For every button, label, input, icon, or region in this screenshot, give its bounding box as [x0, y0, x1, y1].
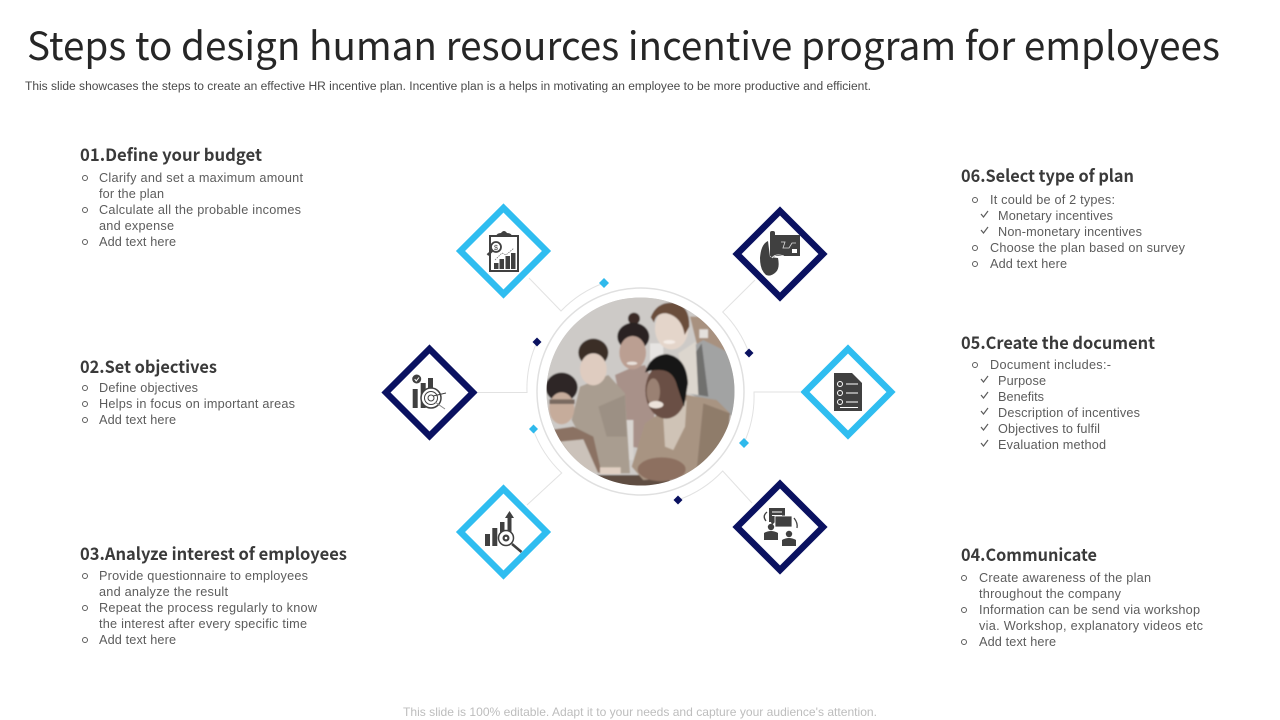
- bullet list: Purpose: [998, 374, 1046, 388]
- title: Steps to design human resources incentive program for employees: [27, 16, 1220, 72]
- connector and arc: step 06: [723, 280, 755, 353]
- heading: 02.Set objectives: [80, 353, 217, 378]
- heading: 06.Select type of plan: [961, 162, 1134, 187]
- footer note: This slide is 100% editable. Adapt it to your needs and capture your audience's attention.: [403, 705, 877, 719]
- icon: budget clipboard in blue diamond: $: [494, 245, 498, 252]
- bullet list: [972, 193, 1186, 271]
- subtitle: This slide showcases the steps to create an effective HR incentive plan. Incentive plan is a helps in motivating an employee to be more productive and efficient.: [25, 81, 871, 93]
- bullet list: [82, 381, 295, 427]
- icon: plan map with hand in navy diamond: [737, 211, 823, 297]
- bullet list: and analyze the result: [99, 585, 228, 599]
- icon: objectives target in navy diamond: [386, 349, 473, 436]
- panel: step 02 set objectives: [80, 353, 295, 427]
- bullet list: for the plan: [99, 187, 164, 201]
- bullet list: Add text here: [99, 413, 176, 427]
- bullet list: Add text here: [99, 235, 176, 249]
- bullet list: Define objectives: [99, 381, 198, 395]
- heading: 04.Communicate: [961, 541, 1097, 566]
- bullet list: Add text here: [979, 635, 1056, 649]
- bullet list: and expense: [99, 219, 174, 233]
- photo: team around a laptop: [546, 298, 734, 486]
- bullet list: Non-monetary incentives: [998, 225, 1142, 239]
- bullet list: Helps in focus on important areas: [99, 397, 295, 411]
- bullet list: Choose the plan based on survey: [990, 241, 1186, 255]
- icon: analysis chart with magnifier in blue diamond: [460, 489, 546, 575]
- bullet list: [82, 569, 318, 647]
- bullet list: Add text here: [990, 257, 1067, 271]
- connector and arc: step 03: [527, 429, 562, 505]
- bullet list: Benefits: [998, 390, 1044, 404]
- bullet list: [962, 571, 1204, 649]
- bullet list: Repeat the process regularly to know: [99, 601, 318, 615]
- bullet list: Information can be send via workshop: [979, 603, 1200, 617]
- heading: 01.Define your budget: [80, 141, 262, 166]
- panel: step 04 communicate: [961, 541, 1204, 649]
- bullet list: Objectives to fulfil: [998, 422, 1100, 436]
- bullet list: Monetary incentives: [998, 209, 1113, 223]
- bullet list: Evaluation method: [998, 438, 1106, 452]
- panel: step 01 define your budget: [80, 141, 303, 249]
- central hub: [530, 280, 750, 500]
- connector and arc: step 02: [478, 342, 537, 392]
- bullet list: Clarify and set a maximum amount: [99, 171, 303, 185]
- connector and arc: step 05: [744, 392, 800, 443]
- bullet list: throughout the company: [979, 587, 1122, 601]
- panel: step 06 select type of plan: [961, 162, 1186, 271]
- bullet list: via. Workshop, explanatory videos etc: [979, 619, 1204, 633]
- connector and arc: step 01: [529, 278, 604, 311]
- heading: 03.Analyze interest of employees: [80, 540, 347, 565]
- small accent diamonds: [529, 278, 754, 504]
- bullet list: It could be of 2 types:: [990, 193, 1115, 207]
- icon: budget clipboard in blue diamond: [460, 208, 546, 294]
- panel: step 05 create the document: [961, 329, 1155, 452]
- bullet list: Add text here: [99, 633, 176, 647]
- bullet list: Description of incentives: [998, 406, 1140, 420]
- heading: 05.Create the document: [961, 329, 1155, 354]
- icon: communicate speech bubbles and people in navy diamond: [737, 484, 823, 570]
- connector and arc: step 04: [678, 471, 752, 503]
- bullet list: Create awareness of the plan: [979, 571, 1151, 585]
- bullet list: the interest after every specific time: [99, 617, 307, 631]
- panel: step 03 analyze interest of employees: [80, 540, 347, 647]
- icon: document checklist in blue diamond: [805, 349, 891, 435]
- bullet list: Provide questionnaire to employees: [99, 569, 308, 583]
- bullet list: Document includes:-: [990, 358, 1111, 372]
- bullet list: Calculate all the probable incomes: [99, 203, 301, 217]
- bullet list: [972, 358, 1140, 452]
- bullet list: [82, 171, 303, 249]
